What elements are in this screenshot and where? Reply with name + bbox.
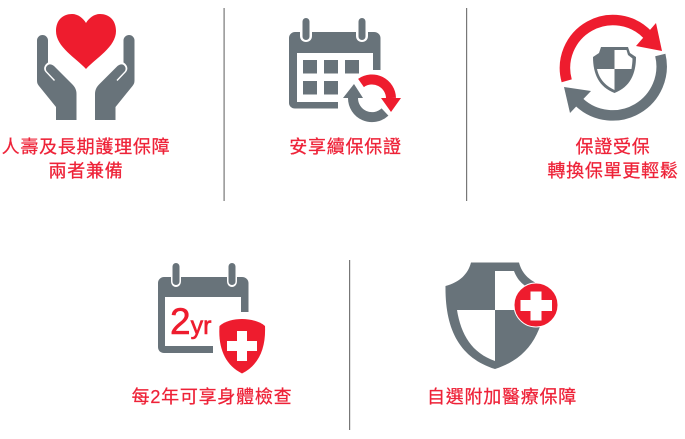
label: 2yr: 2yr	[170, 301, 211, 342]
heading: policy conversion	[547, 137, 679, 181]
panel: life and long-term care	[2, 14, 170, 181]
heading: guaranteed renewal: 安享續保保證	[289, 137, 402, 157]
icon: large shield with cross	[445, 262, 558, 369]
icon: calendar with renew arrows	[289, 18, 401, 117]
icon: red circle cross	[514, 283, 558, 327]
icon: cycle arrows with shield	[564, 20, 662, 115]
icon: heart in hands	[37, 14, 134, 120]
icon: calendar with shield	[158, 263, 265, 374]
heading: health check: 每2年可享身體檢查	[132, 387, 292, 407]
panel: health check every two years	[132, 263, 292, 407]
panel: optional medical rider	[427, 262, 577, 407]
panel: guaranteed renewal	[289, 18, 402, 157]
panel: policy conversion	[547, 20, 679, 181]
heading: life and care	[2, 137, 170, 181]
heading: life and care: 人壽及長期護理保障	[2, 137, 170, 157]
icon: small shield	[593, 47, 636, 93]
heading: policy conversion: 保證受保	[576, 137, 650, 157]
heading: policy conversion: 轉換保單更輕鬆	[547, 160, 679, 181]
icon: red shield with cross	[219, 319, 265, 374]
heading: life and care: 兩者兼備	[48, 161, 124, 181]
heading: medical rider: 自選附加醫療保障	[427, 387, 577, 407]
